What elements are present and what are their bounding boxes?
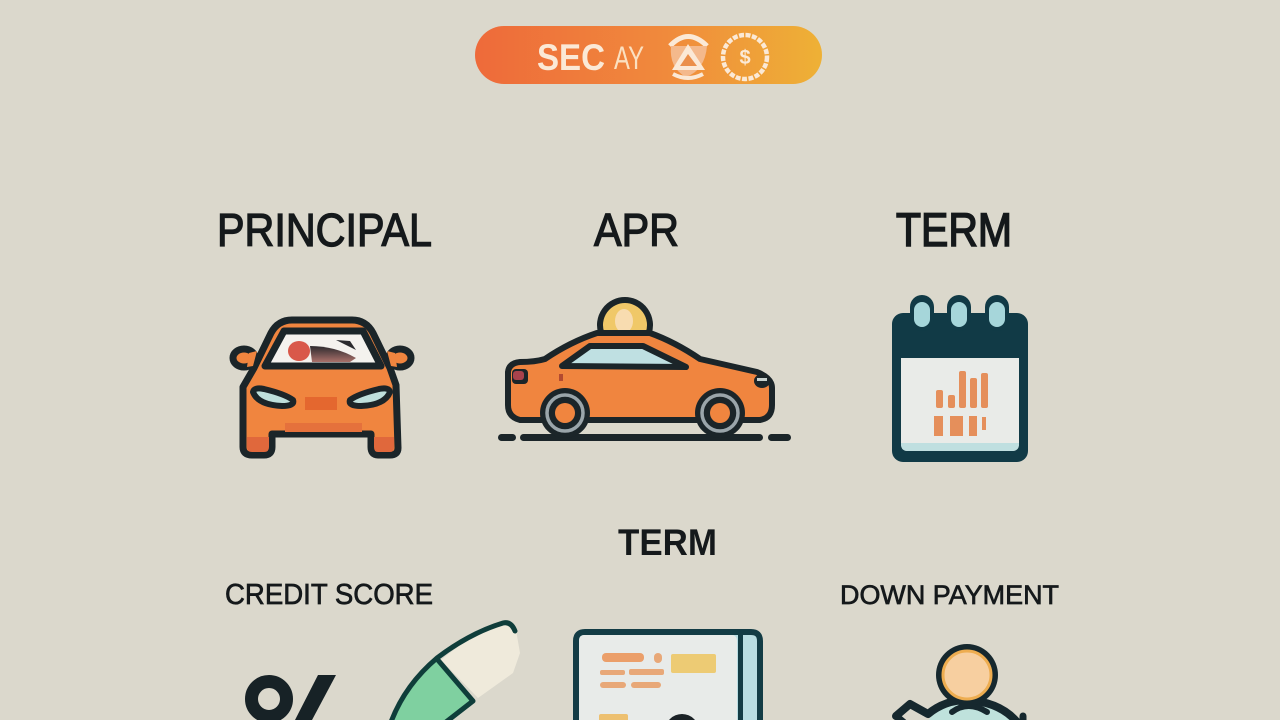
icon: capsule: [391, 623, 520, 720]
heading: credit score: CREDIT SCORE: [225, 579, 433, 611]
icon: car side view with coin: [498, 300, 791, 441]
heading: term: TERM: [896, 203, 1012, 256]
icon: coin and savings pot: [896, 644, 1023, 720]
calendar bars: [934, 371, 988, 436]
icon: percent sign: [252, 675, 336, 720]
road: [498, 434, 791, 441]
icon: calendar: [892, 295, 1028, 462]
document lines: [600, 653, 664, 688]
icon: car front view: [233, 320, 411, 455]
title pill: [475, 26, 822, 84]
icon: document: [576, 632, 760, 720]
pill small text: AY: [614, 40, 644, 76]
pill text: SEC: [537, 37, 605, 78]
coin: [936, 644, 998, 706]
wheels: [540, 388, 745, 438]
calendar page: [901, 358, 1019, 451]
headlights: [253, 388, 390, 406]
coin on roof: [600, 300, 650, 333]
heading: apr: APR: [594, 204, 679, 256]
icon: bell: [670, 36, 707, 78]
heading: down payment: DOWN PAYMENT: [840, 580, 1059, 610]
heading: term center: TERM: [618, 522, 717, 563]
icon: coin: [723, 35, 767, 79]
mirror joints: [247, 351, 397, 367]
windshield: [265, 331, 381, 366]
icon: coin: $: [739, 47, 751, 69]
heading: principal: PRINCIPAL: [217, 204, 432, 256]
